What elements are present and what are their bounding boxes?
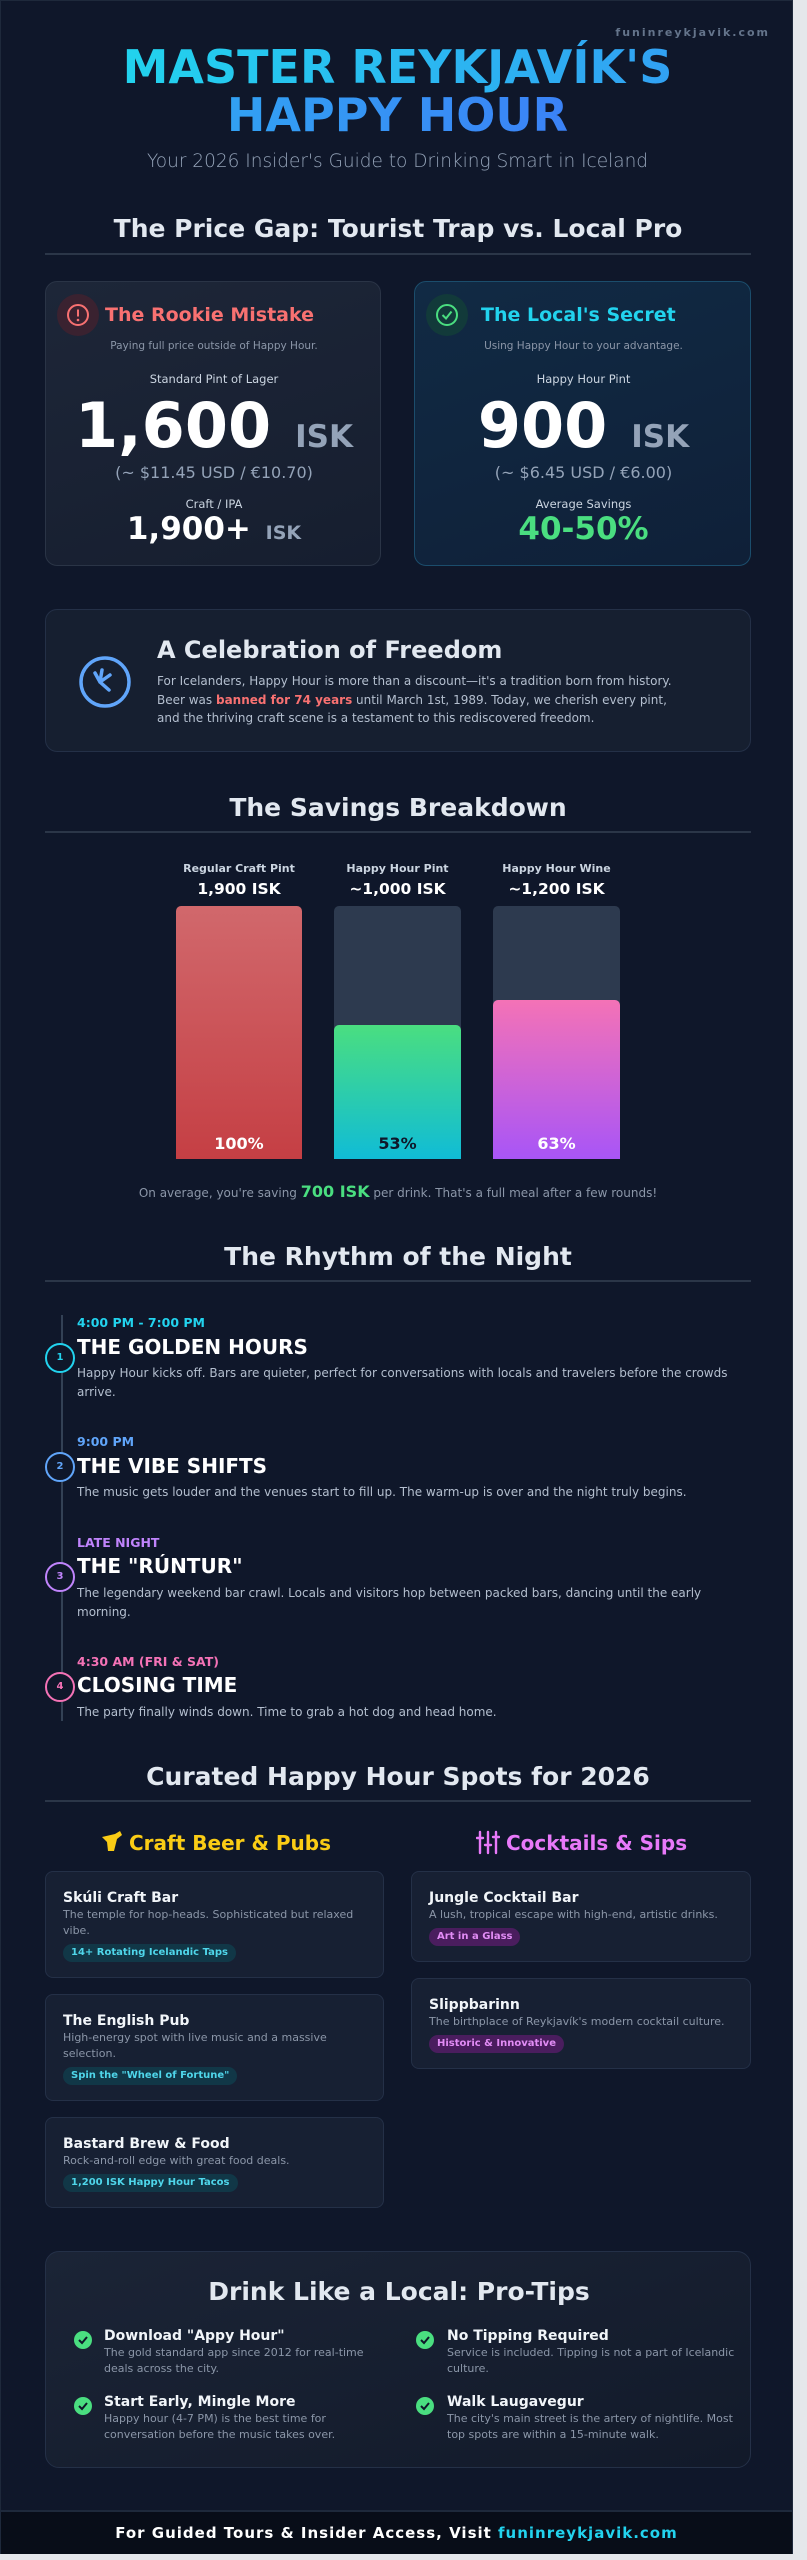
bar: happy pint <box>334 862 461 1159</box>
panel: pro tips: Happy hour (4-7 PM) is the best time for <box>104 2412 326 2425</box>
title: MASTER REYKJAVÍK'S <box>123 40 672 94</box>
spot card: skuli <box>45 1871 384 1978</box>
savings note: On average, you're saving 700 ISK per drink. That's a full meal after a few rounds! <box>139 1182 657 1201</box>
card title: The Rookie Mistake <box>105 304 314 326</box>
text: morning. <box>77 1604 131 1618</box>
text: The party finally winds down. Time to grab a hot dog and head home. <box>77 1705 497 1719</box>
spot card: english pub <box>45 1994 384 2101</box>
panel: pro tips: No Tipping Required <box>447 2328 609 2344</box>
bar: regular: 1,900 ISK <box>197 880 281 898</box>
bar: happy wine <box>493 862 620 1159</box>
text: 4:00 PM - 7:00 PM <box>77 1315 205 1330</box>
panel: local's secret: Average Savings <box>536 497 631 511</box>
text: 1 <box>57 1352 63 1363</box>
panel: rookie mistake: Standard Pint of Lager <box>150 372 278 386</box>
heading: rhythm: The Rhythm of the Night <box>224 1242 572 1271</box>
panel: rookie mistake: (~ $11.45 USD / €10.70) <box>115 463 313 482</box>
panel: rookie mistake: Craft / IPA <box>186 497 242 511</box>
text: The legendary weekend bar crawl. Locals and visitors hop between packed bars, dancing until the early <box>77 1586 701 1600</box>
bar chart: 53% <box>378 1134 417 1153</box>
column heading: cocktails: Cocktails & Sips <box>506 1831 687 1855</box>
spot card: bastard <box>45 2117 384 2208</box>
footer: For Guided Tours & Insider Access, Visit funinreykjavik.com <box>115 2524 678 2542</box>
step 1 <box>45 1315 728 1398</box>
text: 2 <box>57 1461 63 1472</box>
heading: A Celebration of Freedom <box>157 636 502 664</box>
bar: happy pint: Happy Hour Pint <box>346 862 449 875</box>
panel: celebration of freedom <box>45 609 751 752</box>
step 4 <box>45 1654 497 1719</box>
panel: local's secret <box>414 281 751 566</box>
panel: pro tips: Walk Laugavegur <box>447 2394 584 2410</box>
panel: rookie mistake: 1,900+ ISK <box>127 511 301 547</box>
panel: pro tips: culture. <box>447 2362 489 2375</box>
panel: rookie mistake: Paying full price outside of Happy Hour. <box>110 340 318 352</box>
text: THE VIBE SHIFTS <box>77 1454 267 1478</box>
panel: pro tips: Download "Appy Hour" <box>104 2328 285 2344</box>
text: THE GOLDEN HOURS <box>77 1335 308 1359</box>
column heading: craft beer: Craft Beer & Pubs <box>129 1831 331 1855</box>
bar: regular <box>176 862 302 1159</box>
card title: The Local's Secret <box>481 304 676 326</box>
spot card: jungle: Jungle Cocktail Bar <box>429 1890 578 1906</box>
spot card: english pub: The English Pub <box>63 2013 189 2029</box>
panel: pro tips: Service is included. Tipping is not a part of Icelandic <box>447 2346 734 2359</box>
text: LATE NIGHT <box>77 1535 159 1550</box>
subtitle: Your 2026 Insider's Guide to Drinking Smart in Iceland <box>147 151 648 172</box>
tip 1 <box>74 2328 364 2375</box>
icon: freedom <box>79 656 131 708</box>
panel: local's secret: 40-50% <box>518 511 649 547</box>
bar: happy wine: ~1,200 ISK <box>508 880 605 898</box>
panel: local's secret: (~ $6.45 USD / €6.00) <box>495 463 672 482</box>
body text: and the thriving craft scene is a testament to this rediscovered freedom. <box>157 711 594 725</box>
bar chart <box>176 862 620 1159</box>
spot card: bastard: Rock-and-roll edge with great food deals. <box>63 2154 290 2167</box>
bar: regular: Regular Craft Pint <box>183 862 295 875</box>
timeline <box>45 1315 728 1721</box>
spot card: skuli: vibe. <box>63 1924 90 1937</box>
big price: 900 ISK <box>478 389 689 462</box>
spot card: jungle: Art in a Glass <box>437 1931 512 1942</box>
spot card: english pub: selection. <box>63 2047 116 2060</box>
icon: warning <box>57 294 99 336</box>
panel: pro tips: The city's main street is the artery of nightlife. Most <box>447 2412 733 2425</box>
spot card: slippbarinn: Historic & Innovative <box>437 2038 556 2049</box>
spot card: jungle <box>411 1871 751 1962</box>
text: 3 <box>57 1571 63 1582</box>
title <box>123 40 672 142</box>
bar: happy pint: ~1,000 ISK <box>349 880 446 898</box>
footer <box>1 2510 792 2554</box>
text: THE "RÚNTUR" <box>77 1554 243 1578</box>
text: Happy Hour kicks off. Bars are quieter, perfect for conversations with locals and travelers before the crowds <box>77 1366 728 1380</box>
bar: happy wine: Happy Hour Wine <box>502 862 611 875</box>
body text: Beer was banned for 74 years until March 1st, 1989. Today, we cherish every pint, <box>157 692 667 706</box>
text: 4 <box>57 1681 63 1692</box>
bar chart: 100% <box>214 1134 264 1153</box>
panel: pro tips: Start Early, Mingle More <box>104 2394 295 2410</box>
text: arrive. <box>77 1384 116 1398</box>
tip 2 <box>74 2394 335 2441</box>
panel: local's secret: Using Happy Hour to your advantage. <box>484 340 683 352</box>
title: HAPPY HOUR <box>227 88 568 142</box>
tip 3 <box>416 2328 734 2375</box>
panel: pro tips: conversation before the music takes over. <box>104 2428 335 2441</box>
spot card: bastard: Bastard Brew & Food <box>63 2136 230 2152</box>
text: The music gets louder and the venues start to fill up. The warm-up is over and the night truly begins. <box>77 1485 687 1499</box>
spot card: english pub: High-energy spot with live music and a massive <box>63 2031 327 2044</box>
body text: For Icelanders, Happy Hour is more than a discount—it's a tradition born from history. <box>157 674 672 688</box>
spot card: skuli: Skúli Craft Bar <box>63 1890 178 1906</box>
icon: check <box>426 294 468 336</box>
panel: pro tips: deals across the city. <box>104 2362 219 2375</box>
spot card: english pub: Spin the "Wheel of Fortune" <box>71 2070 229 2081</box>
spot card: slippbarinn <box>411 1978 751 2069</box>
panel: pro tips <box>45 2251 751 2468</box>
heading: price gap: The Price Gap: Tourist Trap vs. Local Pro <box>114 214 682 243</box>
text: CLOSING TIME <box>77 1673 237 1697</box>
panel: rookie mistake <box>45 281 381 566</box>
spot card: skuli: The temple for hop-heads. Sophisticated but relaxed <box>63 1908 353 1921</box>
text: 4:30 AM (FRI & SAT) <box>77 1654 219 1669</box>
spot card: skuli: 14+ Rotating Icelandic Taps <box>71 1947 228 1958</box>
heading: savings: The Savings Breakdown <box>229 793 567 822</box>
heading: curated spots: Curated Happy Hour Spots for 2026 <box>146 1762 650 1791</box>
bar chart: 63% <box>537 1134 576 1153</box>
panel: local's secret: Happy Hour Pint <box>537 372 630 386</box>
spot card: slippbarinn: Slippbarinn <box>429 1997 520 2013</box>
heading: Drink Like a Local: Pro-Tips <box>208 2277 590 2306</box>
watermark: funinreykjavik.com <box>615 26 770 39</box>
big price: 1,600 ISK <box>75 389 353 462</box>
spot card: bastard: 1,200 ISK Happy Hour Tacos <box>71 2177 230 2188</box>
step 2 <box>45 1434 687 1499</box>
panel: pro tips: top spots are within a 15-minute walk. <box>447 2428 659 2441</box>
spot card: jungle: A lush, tropical escape with high-end, artistic drinks. <box>429 1908 718 1921</box>
spot card: slippbarinn: The birthplace of Reykjavík's modern cocktail culture. <box>429 2015 725 2028</box>
text: 9:00 PM <box>77 1434 134 1449</box>
tip 4 <box>416 2394 733 2441</box>
step 3 <box>45 1535 701 1618</box>
body text <box>157 674 672 725</box>
panel: pro tips: The gold standard app since 2012 for real-time <box>104 2346 364 2359</box>
